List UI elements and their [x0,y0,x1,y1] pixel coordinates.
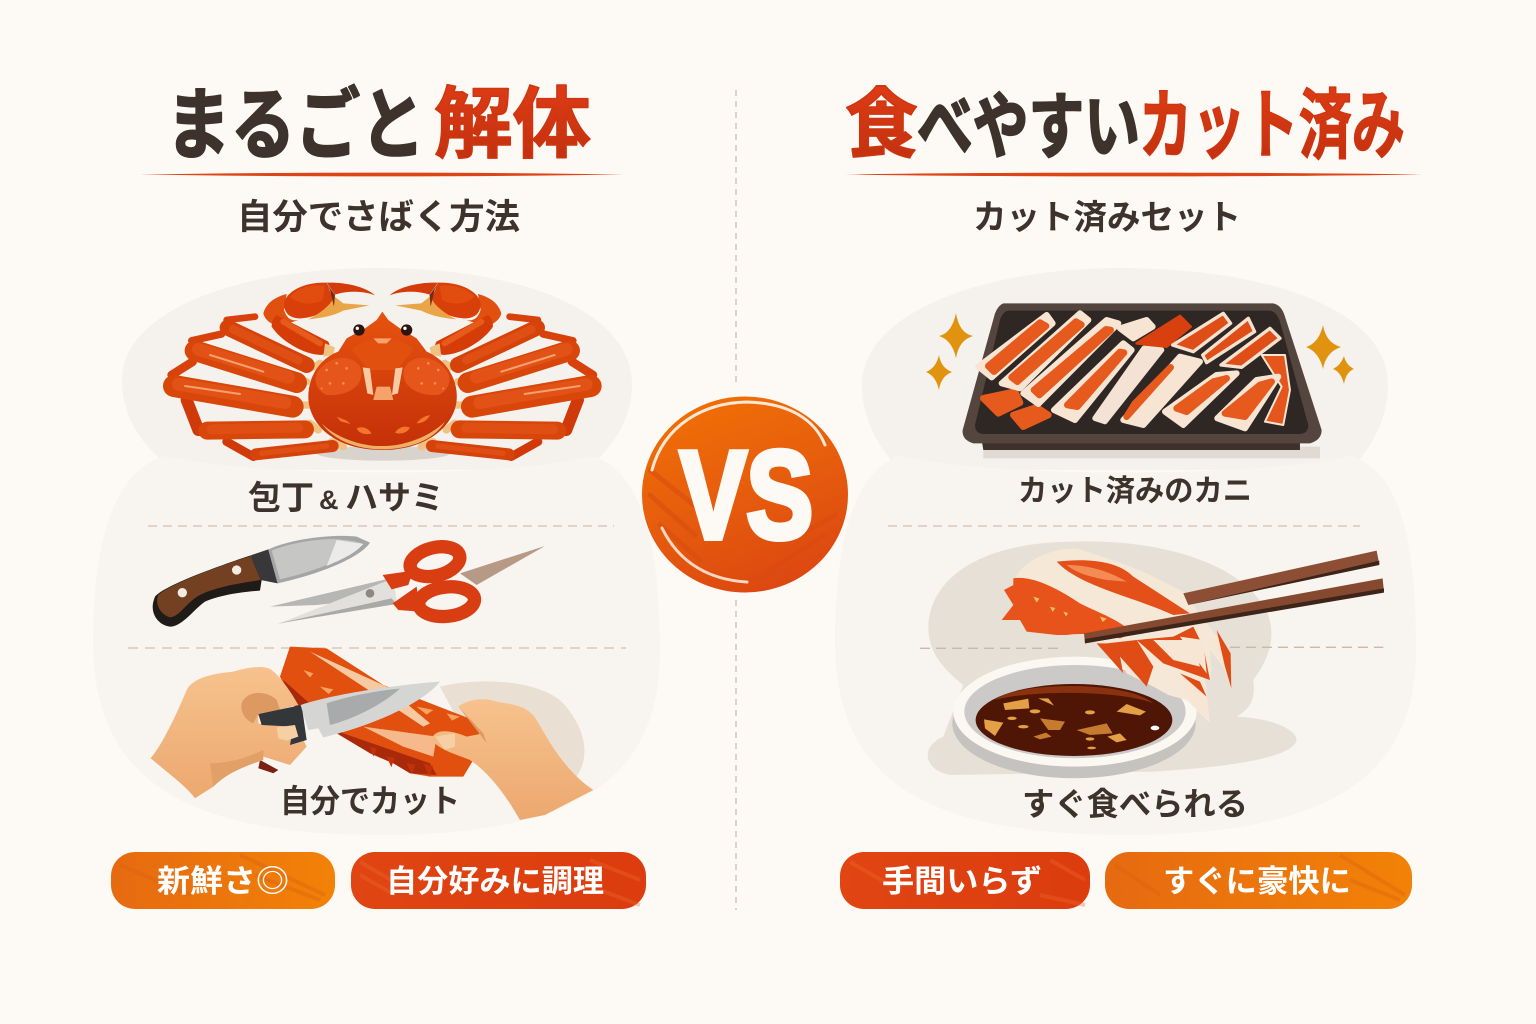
label: cut crab: カット済みのカニ [1018,475,1252,508]
left crab legs [172,283,375,457]
label: knife and scissors: 包丁 [248,479,314,516]
label: knife and scissors: & [319,485,338,515]
sauce [976,684,1172,756]
icon: scissors [270,542,545,624]
icon: kitchen knife [153,536,370,627]
crab sticks [978,313,1290,428]
right top background blob [862,268,1388,470]
panel: right pre-cut side [835,83,1422,909]
title: whole crab: 解体 [434,80,591,168]
badge: luxury: すぐに豪快に [1163,864,1351,899]
label: cut yourself: 自分でカット [280,783,460,819]
right crab legs (mirror) [390,283,593,457]
label: ready to eat: すぐ食べられる [1022,786,1248,822]
panel: left whole-crab side [93,80,660,909]
dipping dish [952,668,1196,778]
badge: no effort [840,852,1090,909]
badge: cook your way [351,852,646,909]
chopsticks [1183,551,1379,605]
beige shadow blob [928,541,1297,775]
title: pre-cut: 食 [845,83,918,168]
subtitle: right: カット済みセット [973,199,1241,237]
right hand [432,699,593,820]
title: pre-cut: カット済み [1139,84,1405,169]
badge: luxury [1105,852,1412,909]
crab meat [1002,548,1232,723]
title: pre-cut: べやすい [917,88,1140,168]
badge: cook your way: 自分好みに調理 [386,864,604,899]
left top background blob [122,268,632,470]
VS badge [642,396,848,592]
VS letters: VS [680,427,813,565]
illustration: hands cutting crab leg [151,647,593,820]
right lower background blob [835,456,1416,835]
left lower background blob [93,456,660,835]
title: pre-cut [845,83,1405,169]
badge: freshness: 新鮮さ◎ [157,864,289,899]
crab shell [308,312,457,450]
badge: no effort: 手間いらず [882,864,1042,899]
icon: snow crab [172,283,593,461]
crab leg piece [280,647,483,777]
icon: left sparkles [926,313,973,390]
icon: tray of cut crab [963,303,1322,458]
center divider [735,90,737,910]
title underline left [140,173,623,176]
title: whole crab: まるごと [166,81,425,169]
knife in hand [258,705,307,745]
icon: right sparkles [1306,325,1354,384]
label: knife and scissors: ハサミ [345,479,444,516]
subtitle: left: 自分でさばく方法 [237,198,520,237]
badge: freshness [111,852,335,909]
crab eyes [353,324,412,336]
illustration: chopsticks and dipping sauce [920,541,1384,778]
title underline right [845,173,1422,176]
left hand [151,667,307,798]
